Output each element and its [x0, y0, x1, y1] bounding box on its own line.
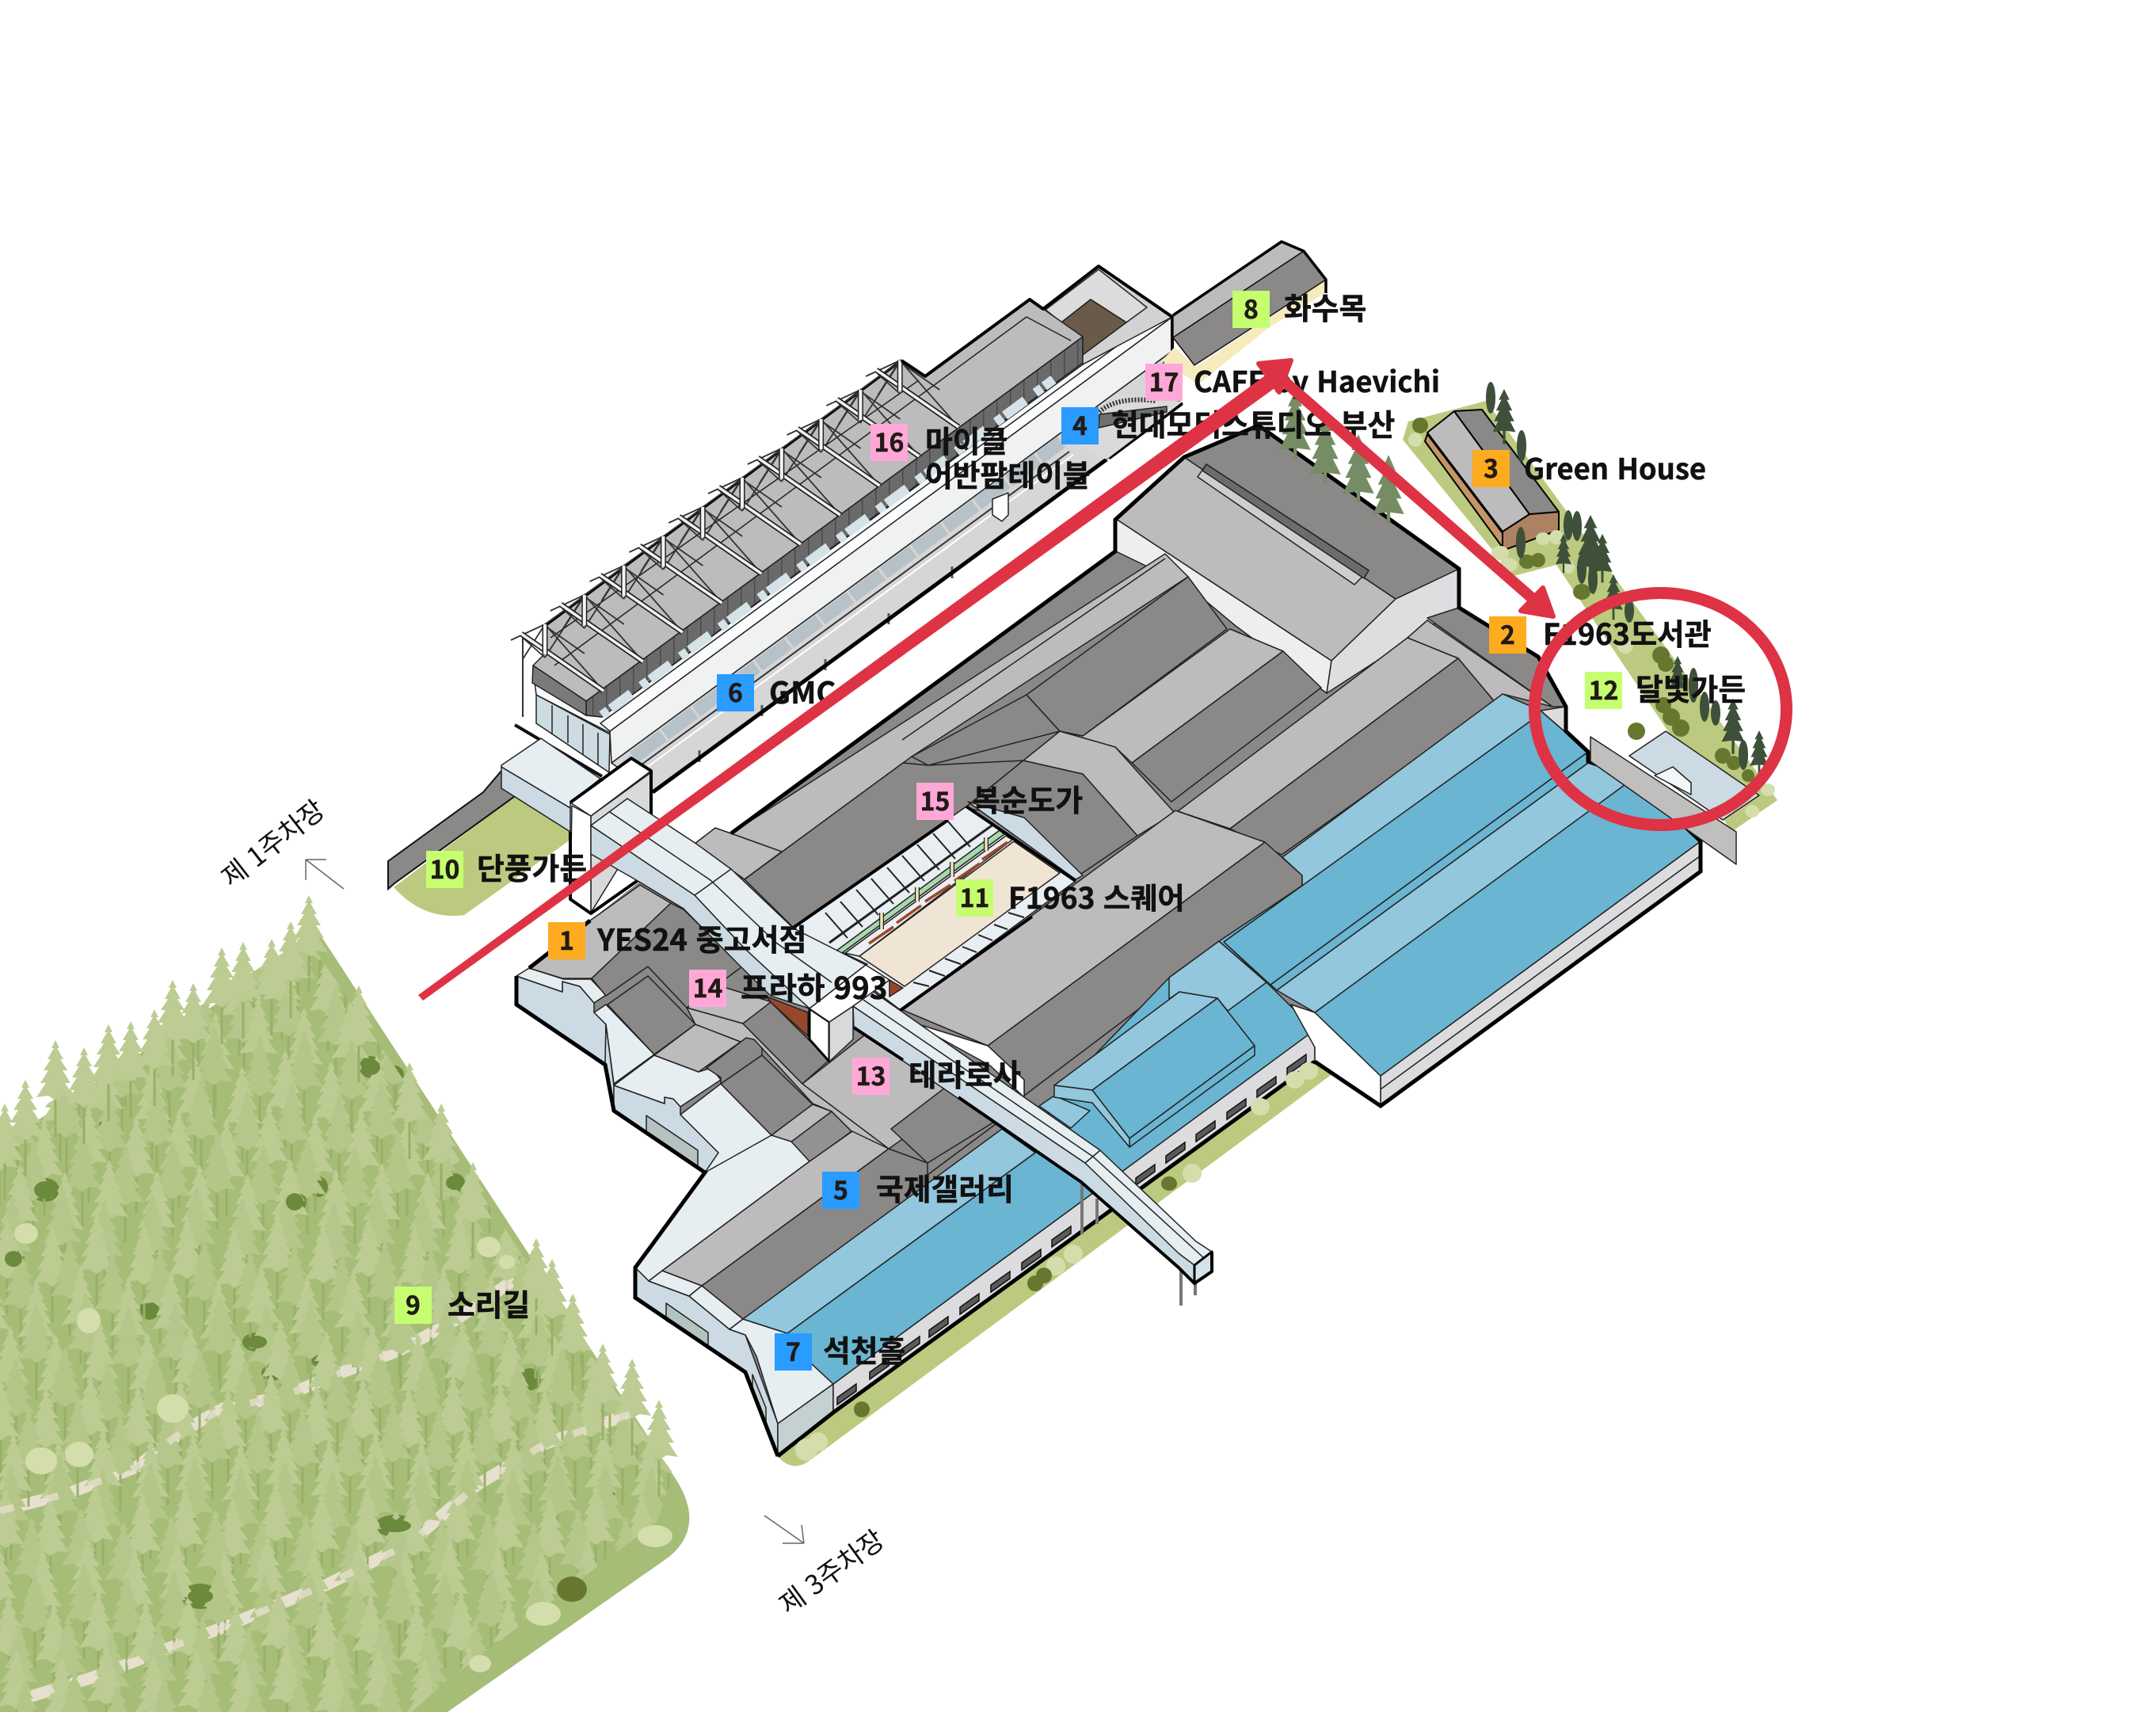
windows along the long wall — [837, 1054, 1306, 1405]
red highlight circle — [1535, 593, 1787, 825]
big hall light band — [1277, 763, 1634, 1012]
label: 5 Kukje Gallery: 국제갤러리 — [876, 1165, 1014, 1209]
label: 8 Hwasumok: 화수목 — [1284, 284, 1366, 328]
label: 15 Boksoon Doga: 복순도가 — [973, 776, 1083, 820]
light roof — [1173, 242, 1304, 337]
bridge 1 deck lines — [610, 812, 832, 982]
red arrow: toward the library — [1284, 381, 1553, 616]
pale windows — [602, 379, 1053, 715]
truss 7 — [748, 420, 840, 515]
post 2 — [1181, 1268, 1195, 1306]
lawn — [394, 796, 570, 916]
stair landing — [1080, 394, 1183, 459]
gallery ice face — [635, 1135, 809, 1281]
label: 6 GMC: 6 — [728, 673, 743, 710]
paver lines — [913, 913, 1024, 986]
dark roof — [1454, 410, 1559, 514]
courtyard gable dark — [965, 761, 1137, 877]
gable end strip — [1054, 1085, 1129, 1147]
beige posts — [882, 837, 986, 929]
label: 12 Moonlight Garden: 12 — [1589, 671, 1618, 707]
arrow to parking lot 1 — [306, 860, 344, 889]
label: 9 Sori-gil: 소리길 — [448, 1281, 530, 1325]
bridge side 2 — [853, 1006, 1194, 1283]
roof A light — [695, 554, 1188, 879]
staircase — [1099, 406, 1167, 428]
bridge thick lower edge — [854, 1028, 1212, 1283]
red arrow: toward the north entrance — [418, 360, 1291, 1001]
label: 15 Boksoon Doga — [916, 776, 1083, 820]
label: 3 Green House: 3 — [1484, 449, 1499, 486]
pale deck — [1629, 731, 1759, 820]
gray lane — [687, 1008, 889, 1149]
label: 8 Hwasumok — [1232, 284, 1366, 328]
label: 10 Danpung Garden — [426, 845, 587, 888]
small white box — [1655, 767, 1691, 795]
gallery ice slope — [649, 1271, 702, 1296]
truss 3 — [590, 537, 683, 632]
courtyard thick edges — [792, 806, 1076, 1010]
building: hwa-su-mok — [1162, 242, 1326, 384]
roof F dark — [988, 842, 1302, 1096]
roof inner line — [550, 317, 1071, 665]
tower top — [570, 758, 651, 816]
end block mullions — [552, 705, 598, 765]
stair rail — [1099, 400, 1156, 412]
balcony — [515, 725, 602, 776]
bridge side 1 — [591, 825, 809, 1009]
concrete wall — [388, 771, 515, 889]
brown court — [1061, 299, 1126, 355]
dark section — [790, 1111, 851, 1162]
opening — [646, 1115, 698, 1166]
wing top 2 — [614, 1055, 721, 1107]
label: 2 F1963 library: F1963도서관 — [1543, 611, 1712, 654]
label: 14 Praha 993: 프라하 993 — [741, 964, 888, 1009]
truss 5 — [669, 479, 761, 574]
connector box left — [809, 1009, 829, 1062]
gallery rail — [638, 452, 1069, 767]
label: 16 Michael Urban Farm Table: 마이클 — [925, 418, 1008, 461]
left bridge deck — [501, 738, 600, 808]
big hall wall — [1381, 841, 1701, 1106]
main complex base — [516, 425, 1701, 1456]
upper-left building: GMC, Michael urban farm table, Hyundai Motorstudio — [511, 266, 1183, 792]
green house garden strip — [1403, 401, 1777, 832]
upper rear terrace — [1043, 266, 1172, 364]
parking label: lot 1: 제 1주차장 — [212, 789, 332, 894]
roof fascia — [532, 665, 586, 715]
big hall dark roof — [1184, 425, 1459, 599]
rear roofline outline — [901, 266, 1172, 376]
label: 11 F1963 Square: 11 — [960, 879, 989, 915]
lower hall dark blue — [787, 941, 1315, 1384]
label: 12 Moonlight Garden: 달빛가든 — [1636, 665, 1746, 709]
support pier — [992, 493, 1008, 521]
label: 17 Cafe by Haevichi: 17 — [1149, 363, 1179, 399]
house — [1425, 410, 1559, 551]
bridge deck 1 — [591, 799, 866, 1009]
gallery rail white — [643, 455, 1073, 770]
upper dark blue — [1224, 711, 1588, 985]
bridge 2 lines — [863, 1000, 1204, 1258]
dark shrub near the corner — [557, 1577, 587, 1602]
gallery front wall — [635, 1268, 778, 1456]
truss 4 — [629, 508, 722, 603]
brick wall — [767, 997, 808, 1036]
gallery door — [666, 1303, 708, 1345]
label: 16 Michael Urban Farm Table — [870, 418, 1091, 495]
arrow to parking lot 3 — [764, 1516, 804, 1543]
big hall white face — [1291, 1005, 1381, 1106]
beige plaza — [859, 841, 1060, 986]
upper blue filler — [1219, 886, 1302, 982]
long wall — [833, 1030, 1315, 1413]
brick corner — [889, 980, 903, 997]
big hall left wall — [1116, 519, 1331, 693]
truss 9 — [826, 361, 919, 456]
main complex: left wing — [516, 885, 1018, 1456]
pine trees — [1493, 389, 1769, 776]
gallery plinth top — [729, 1319, 833, 1424]
center dark roof — [743, 1002, 829, 1084]
dark shrubs — [1412, 418, 1754, 782]
label: 10 Danpung Garden: 10 — [430, 850, 459, 887]
cream terrace — [1162, 280, 1326, 384]
dark right of terrace — [891, 1077, 1002, 1163]
label: 16 Michael Urban Farm Table: 16 — [874, 423, 904, 459]
wing top 1 — [516, 968, 606, 1003]
forest: sori-gil hillside — [0, 889, 721, 1712]
white wedge — [911, 1022, 1024, 1097]
terrace — [802, 1030, 962, 1149]
green house 3 building and planting — [1279, 382, 1775, 818]
ice wedge — [968, 802, 1083, 879]
label: 12 Moonlight Garden — [1585, 665, 1746, 709]
label: 8 Hwasumok: 8 — [1244, 290, 1259, 326]
label: 4 Hyundai Motorstudio: 4 — [1072, 406, 1088, 443]
label: 14 Praha 993: 14 — [693, 969, 722, 1005]
glazed end block — [536, 695, 610, 772]
white strip — [600, 317, 1172, 731]
wing slope 2 — [680, 1084, 771, 1191]
bridge end — [1194, 1252, 1212, 1283]
walking paths — [0, 1268, 630, 1702]
canopy rail — [829, 824, 994, 943]
label: 2 F1963 library: 2 — [1500, 616, 1515, 652]
green verge — [778, 1062, 1333, 1466]
lower hall light blue — [743, 1129, 1035, 1333]
dark shrubs — [2, 1056, 615, 1609]
pale shrubs — [14, 1223, 672, 1672]
left bridge side — [501, 767, 570, 832]
small gable — [912, 695, 1060, 765]
wing wall 2 — [614, 1085, 718, 1172]
rear terrace rim — [1046, 269, 1147, 322]
label: 1 YES24 bookstore: 1 — [559, 921, 574, 958]
wall — [610, 317, 1172, 763]
courtyard base — [792, 806, 1076, 1010]
gable light — [1054, 992, 1217, 1090]
lower dark roof — [608, 976, 695, 1054]
courtyard: F1963 square — [792, 802, 1083, 1010]
blue roofs — [743, 694, 1701, 1466]
label: 15 Boksoon Doga: 15 — [920, 782, 950, 818]
middle roof light — [1060, 629, 1283, 763]
label: 7 Seokcheon Hall: 석천홀 — [823, 1327, 905, 1371]
connector box right — [829, 1006, 853, 1062]
front corner wall — [778, 1384, 833, 1456]
verge shrubs — [795, 1062, 1318, 1461]
courtyard gable light — [1023, 731, 1175, 836]
label: 13 Terarosa — [852, 1051, 1021, 1096]
gallery light roof — [662, 1131, 889, 1286]
gable strip — [1129, 1046, 1255, 1147]
lower light roof — [654, 1024, 741, 1072]
brick steps — [834, 953, 867, 972]
label: 6 GMC: GMC — [769, 669, 836, 712]
long wall base line — [778, 1062, 1315, 1456]
brown wall — [1425, 434, 1503, 547]
gray roof — [533, 299, 1083, 701]
roof D dark — [1230, 658, 1495, 855]
tower right face — [591, 772, 651, 913]
ground level gallery — [611, 351, 1181, 792]
tower front face — [570, 806, 591, 913]
label: 10 Danpung Garden: 단풍가든 — [477, 845, 587, 888]
label: 4 Hyundai Motorstudio: 현대모터스튜디오 부산 — [1111, 401, 1395, 444]
shrubs between trees — [5, 1059, 463, 1603]
middle roof dark — [1132, 651, 1321, 802]
thin dark strip — [1270, 752, 1588, 990]
gable dark — [1092, 998, 1255, 1138]
label: 16 Michael Urban Farm Table: 어반팜테이블 — [925, 452, 1091, 495]
path patches seen through the trees — [0, 1268, 630, 1702]
label: 7 Seokcheon Hall — [775, 1327, 905, 1371]
big hall lower dark blue — [1315, 778, 1701, 1076]
light section — [771, 1104, 832, 1142]
truss 1 — [511, 596, 604, 691]
small block light — [1169, 941, 1267, 1011]
big hall wall line — [1381, 856, 1701, 1089]
gallery ice slope 2 — [689, 1286, 743, 1329]
gallery base line — [653, 382, 1181, 792]
edge trees — [0, 895, 678, 1497]
connector box top — [809, 965, 889, 1022]
parking label: lot 3: 제 3주차장 — [770, 1519, 891, 1622]
roof A dark — [1027, 577, 1227, 736]
label: 1 YES24 bookstore: YES24 중고서점 — [596, 916, 806, 959]
truss 10 — [866, 360, 958, 427]
big hall light roof — [1116, 457, 1396, 661]
back edge light — [1541, 707, 1588, 752]
forest ground — [0, 936, 689, 1712]
wing slope 1 — [594, 1005, 654, 1084]
ridge — [707, 1038, 762, 1084]
cypress trees — [1486, 382, 1748, 770]
wedge light — [1039, 1096, 1090, 1128]
label: 11 F1963 Square: F1963 스퀘어 — [1008, 875, 1185, 917]
beige post fill — [882, 837, 986, 929]
label: 3 Green House: Green House — [1524, 447, 1706, 488]
column — [522, 634, 524, 717]
bridge deck 2 — [853, 990, 1212, 1265]
bookstore light roof — [529, 885, 671, 978]
roof back edge — [545, 360, 901, 626]
roof D upper dark — [1427, 608, 1566, 707]
garden: danpung garden and wall — [388, 771, 570, 916]
light patch near Praha — [687, 988, 772, 1024]
label: 5 Kukje Gallery: 5 — [833, 1171, 848, 1207]
dark roof — [1173, 251, 1326, 365]
end wall — [1503, 512, 1559, 551]
upper light blue — [1282, 694, 1541, 886]
corner door — [752, 1375, 766, 1424]
white deck — [535, 317, 1172, 733]
moonlight garden pavilion — [1590, 731, 1759, 864]
roof below ridge — [721, 1055, 813, 1135]
gallery brackets — [699, 566, 952, 762]
concrete wall — [1590, 737, 1736, 864]
roof thick top — [1173, 242, 1326, 315]
medium pines beside the hall — [1279, 391, 1404, 523]
green bed — [833, 830, 1004, 953]
label: 6 GMC — [717, 669, 836, 712]
light roof — [1427, 411, 1529, 532]
gallery dark roof — [702, 1119, 1018, 1319]
bookstore dark roof — [592, 903, 742, 1008]
roof D upper light — [1407, 620, 1552, 707]
pale shrubs — [1408, 433, 1775, 818]
monitor light band — [1198, 464, 1369, 585]
label: 13 Terarosa: 테라로사 — [908, 1051, 1021, 1096]
gallery window band — [634, 442, 1061, 757]
truss 2 — [550, 566, 643, 662]
wing face 2 — [605, 1024, 614, 1111]
main complex: gray roofs — [695, 425, 1566, 1097]
truss 8 — [787, 391, 880, 486]
complex outline — [516, 425, 1701, 1456]
wing wall 1 — [516, 976, 606, 1065]
glass canopy cells — [825, 822, 970, 938]
truss 6 — [708, 449, 801, 544]
pale strip — [845, 836, 1012, 956]
label: 7 Seokcheon Hall: 7 — [786, 1333, 801, 1369]
tree rows — [0, 928, 672, 1712]
window band — [586, 337, 1083, 717]
label: 13 Terarosa: 13 — [856, 1057, 886, 1093]
post under bridge — [1082, 1183, 1097, 1234]
monitor dark band — [1202, 464, 1369, 578]
roof F light — [903, 810, 1265, 1046]
roof B dark — [745, 761, 1023, 931]
roof D light — [1178, 638, 1458, 829]
big hall right wall — [1327, 569, 1459, 693]
label: 17 Cafe by Haevichi: CAFE by Haevichi — [1194, 360, 1440, 401]
tower outline — [570, 758, 651, 913]
label: 9 Sori-gil — [394, 1281, 530, 1325]
brown benches — [869, 842, 1008, 944]
roof A line — [731, 559, 1165, 879]
label: 9 Sori-gil: 9 — [406, 1286, 421, 1322]
bridges — [501, 738, 1212, 1306]
